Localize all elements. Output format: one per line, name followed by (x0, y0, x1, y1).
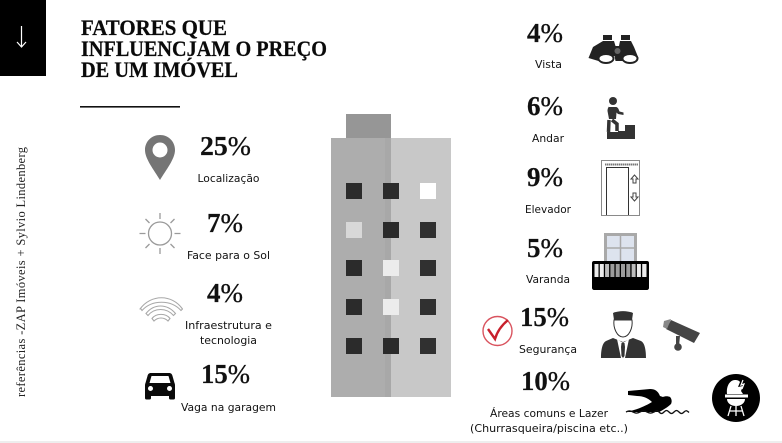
label: Varanda (526, 274, 570, 286)
item: Face para o Sol (140, 208, 270, 262)
item: Elevador (525, 160, 640, 216)
label: Segurança (519, 344, 577, 356)
percentage: 10% (521, 366, 570, 396)
title: FATORES QUE (81, 15, 227, 40)
icon: car (145, 373, 175, 400)
percentage: 4% (207, 278, 243, 308)
icon: barbecue grill (712, 374, 760, 422)
item: Varanda (526, 233, 649, 290)
percentage: 6% (527, 91, 563, 121)
icon: swimmer (626, 389, 689, 414)
item: Andar (527, 91, 635, 145)
label: Vista (535, 59, 562, 71)
icon: sun (140, 213, 180, 254)
label: Infraestrutura e (185, 320, 272, 332)
icon: balcony (592, 233, 649, 290)
icon: binoculars (588, 35, 638, 64)
windows (346, 183, 436, 354)
item: Vista (527, 18, 638, 71)
icon: security camera (663, 319, 700, 351)
percentage: 4% (527, 18, 563, 48)
percentage: 9% (527, 162, 563, 192)
icon: security guard (601, 311, 646, 358)
percentage: 5% (527, 233, 563, 263)
title: DE UM IMÓVEL (81, 57, 238, 82)
percentage: 7% (207, 208, 243, 238)
label: Face para o Sol (187, 250, 270, 262)
label: Localização (198, 173, 260, 185)
building illustration (331, 114, 451, 397)
icon: person climbing stairs (607, 97, 635, 139)
title underline (80, 106, 180, 108)
percentage: 15% (201, 359, 250, 389)
label: Vaga na garagem (181, 402, 276, 414)
percentage: 15% (520, 302, 569, 332)
item: Infraestrutura e tecnologia: tecnologia (200, 335, 257, 347)
percentage: 25% (200, 131, 251, 161)
title (81, 15, 327, 82)
label: Áreas comuns e Lazer (490, 407, 609, 420)
label: Andar (532, 133, 565, 145)
icon: elevator (602, 160, 640, 216)
title: INFLUENCJAM O PREÇO (81, 36, 327, 61)
item: Áreas comuns e Lazer (470, 366, 760, 435)
item: Infraestrutura e tecnologia (140, 278, 272, 347)
item: Áreas comuns e Lazer: (Churrasqueira/piscina etc..) (470, 423, 628, 435)
icon: red check badge (483, 316, 512, 346)
item: Segurança (483, 302, 700, 358)
item: Vaga na garagem (145, 359, 276, 414)
black box with down arrow (0, 0, 46, 76)
icon: wifi (140, 298, 182, 321)
item: Localização (145, 131, 260, 185)
icon: map pin (145, 135, 175, 180)
label: Elevador (525, 204, 572, 216)
vertical references text: referências -ZAP Imóveis + Sylvio Lindenberg (14, 146, 28, 397)
